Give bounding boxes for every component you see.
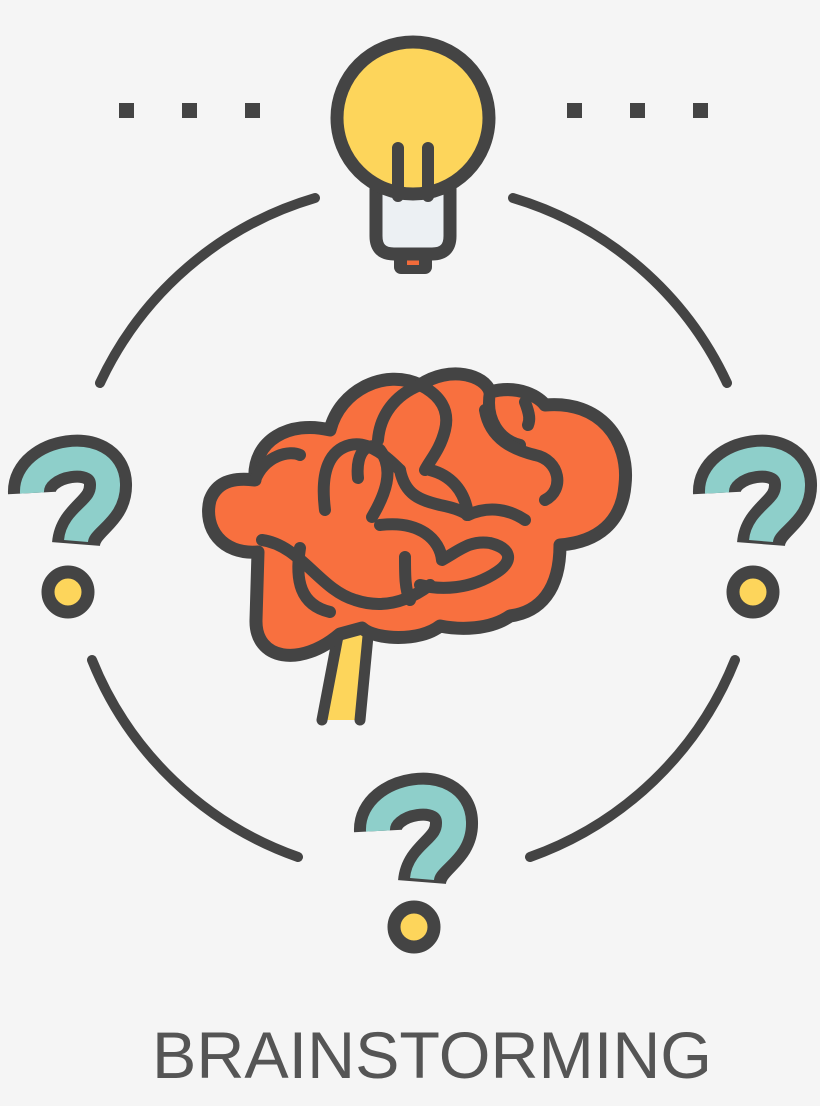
icon: lightbulb [337,42,489,274]
dotted lines left [119,103,260,118]
title: BRAINSTORMING [152,1018,712,1092]
icon: question bottom [378,797,454,947]
icon: question left [32,459,108,612]
icon: brain [209,374,626,720]
dotted lines right [567,103,708,118]
circle arcs [92,198,735,857]
icon: question right [717,459,793,612]
